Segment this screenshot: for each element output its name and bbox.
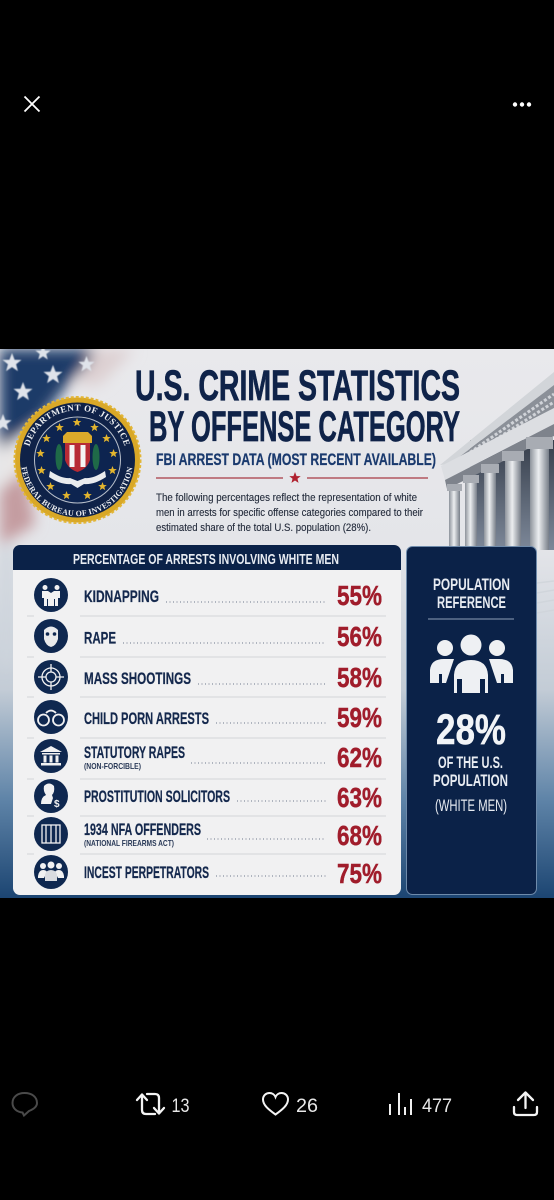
population heading <box>434 578 510 608</box>
row: incest perpetrators: INCEST PERPETRATORS <box>84 863 209 882</box>
row: mass shootings: 58% <box>337 662 382 693</box>
intro text: The following percentages reflect the representation of white <box>156 492 417 504</box>
icon: reply <box>12 1093 37 1116</box>
like count: 26 <box>296 1096 318 1117</box>
population heading: POPULATION <box>433 576 510 594</box>
row: statutory rapes: STATUTORY RAPES <box>84 743 185 762</box>
row: rape: 56% <box>337 621 382 652</box>
icon: prison bars <box>34 817 68 851</box>
stat caption: OF THE U.S. <box>438 754 503 772</box>
icon: three people <box>430 634 513 694</box>
row: statutory rapes: (NON-FORCIBLE) <box>84 761 141 771</box>
icon: courthouse <box>34 739 68 773</box>
panel header: PERCENTAGE OF ARRESTS INVOLVING WHITE MEN <box>73 552 339 568</box>
fbi seal <box>14 396 142 524</box>
row: 1934 nfa offenders <box>34 817 382 851</box>
subtitle: FBI ARREST DATA (MOST RECENT AVAILABLE) <box>156 450 436 469</box>
stat caption: (WHITE MEN) <box>435 797 507 815</box>
action bar <box>12 1092 537 1117</box>
seal laurel <box>56 444 100 470</box>
row: rape <box>34 619 382 653</box>
views count: 477 <box>422 1096 452 1117</box>
icon: more menu <box>513 102 531 107</box>
steps at right edge <box>537 580 554 594</box>
background gradient <box>0 349 554 898</box>
row: kidnapping <box>34 578 382 612</box>
intro text: men in arrests for specific offense categories compared to their <box>156 507 423 519</box>
icon: person with dollar: $ <box>54 799 60 810</box>
seal bottom text: FEDERAL BUREAU OF INVESTIGATION <box>21 466 132 516</box>
row: 1934 nfa offenders: 1934 NFA OFFENDERS <box>84 820 201 839</box>
panel header <box>13 545 401 570</box>
infographic image <box>0 349 554 898</box>
icon: group <box>34 855 68 889</box>
row: mass shootings <box>34 660 382 694</box>
icon: share <box>514 1092 537 1115</box>
seal top text: DEPARTMENT OF JUSTICE <box>24 404 130 446</box>
repost count: 13 <box>172 1096 190 1117</box>
row: child porn arrests <box>34 700 382 734</box>
row: 1934 nfa offenders: 68% <box>337 820 382 851</box>
stat caption <box>433 754 508 815</box>
seal shield <box>63 432 92 472</box>
row: prostitution solicitors <box>34 779 382 813</box>
row: kidnapping: KIDNAPPING <box>84 587 159 606</box>
panel: arrest percentages <box>13 545 401 895</box>
stat: 28%: 28% <box>436 706 506 754</box>
icon: crosshair <box>34 660 68 694</box>
building: columned courthouse <box>440 372 554 550</box>
row: rape: RAPE <box>84 628 116 648</box>
divider with star <box>156 472 428 483</box>
row: mass shootings: MASS SHOOTINGS <box>84 669 191 688</box>
row: statutory rapes <box>34 739 382 773</box>
row: prostitution solicitors: PROSTITUTION SOLICITORS <box>84 787 230 806</box>
row: child porn arrests: CHILD PORN ARRESTS <box>84 709 209 728</box>
seal ribbon <box>49 471 106 488</box>
panel: population reference <box>406 546 536 894</box>
seal stars <box>36 418 118 499</box>
row: child porn arrests: 59% <box>337 702 382 733</box>
american flag backdrop <box>0 349 130 590</box>
row: incest perpetrators <box>34 855 382 889</box>
icon: like <box>263 1093 288 1114</box>
row: prostitution solicitors: 63% <box>337 782 382 813</box>
icon: handcuffs <box>34 700 68 734</box>
icon: repost <box>137 1094 164 1114</box>
intro text <box>156 492 423 534</box>
population heading: REFERENCE <box>437 594 506 612</box>
icon: mask <box>34 619 68 653</box>
row: incest perpetrators: 75% <box>337 858 382 889</box>
row: statutory rapes: 62% <box>337 742 382 773</box>
row: 1934 nfa offenders: (NATIONAL FIREARMS ACT) <box>84 838 174 848</box>
icon: close <box>24 96 40 112</box>
icon: person with dollar <box>34 779 68 813</box>
row: kidnapping: 55% <box>337 580 382 611</box>
icon: views <box>390 1093 411 1115</box>
icon: two figures <box>34 578 68 612</box>
title <box>136 370 460 442</box>
stat caption: POPULATION <box>433 772 508 790</box>
intro text: estimated share of the total U.S. population (28%). <box>156 522 371 534</box>
